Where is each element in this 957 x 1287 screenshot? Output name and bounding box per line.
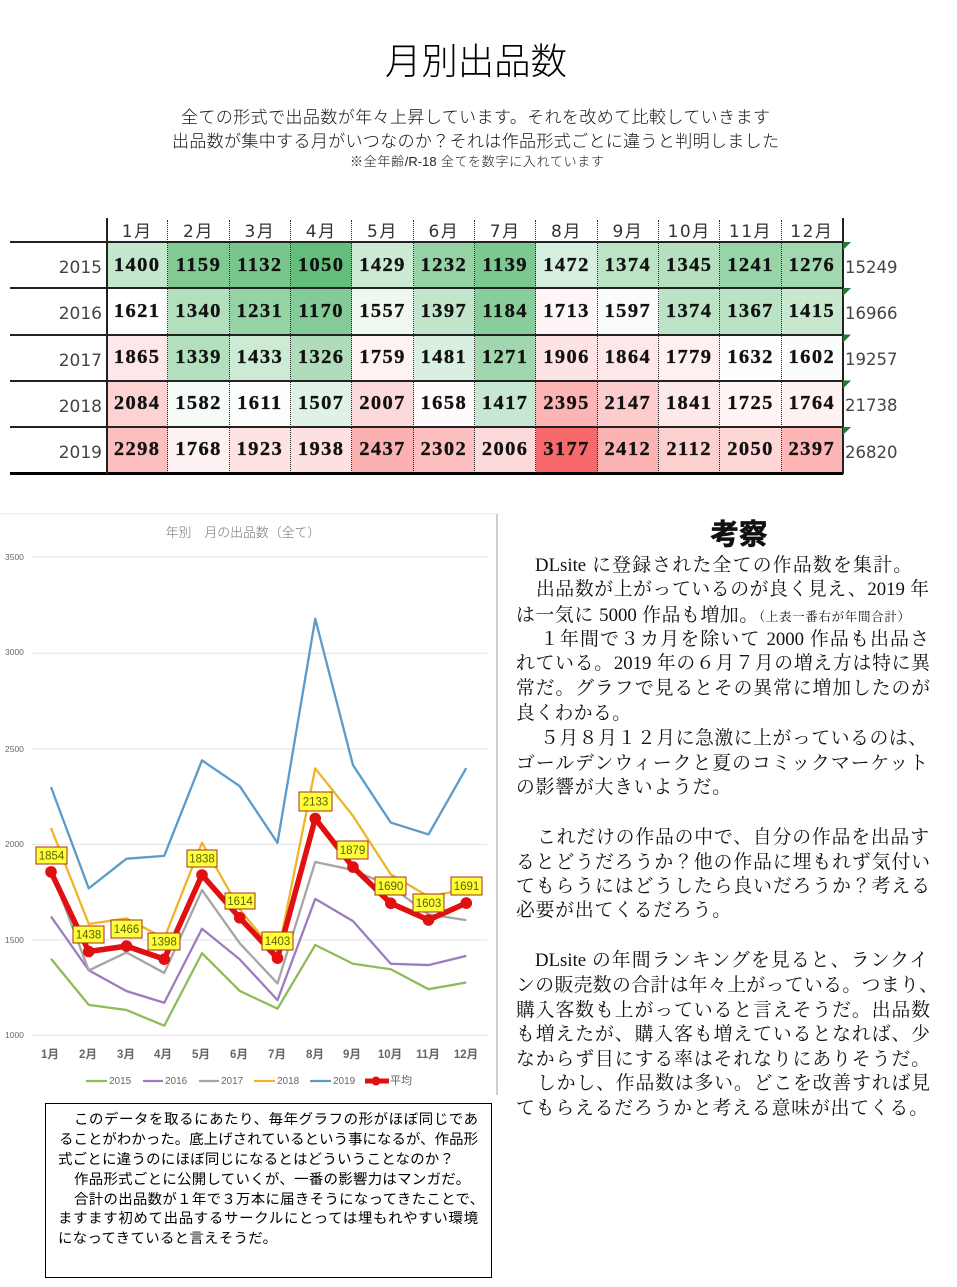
heatmap table: 1621 — [114, 300, 160, 322]
heatmap table: 1611 — [237, 392, 283, 414]
heatmap table: 1865 — [114, 346, 160, 368]
heatmap table: 1184 — [482, 300, 528, 322]
callout box — [45, 1103, 492, 1278]
heatmap table: 11月 — [729, 222, 772, 242]
heatmap table: 2016 — [59, 304, 102, 324]
heatmap table: 1374 — [605, 254, 651, 276]
x axis month labels: 1月 — [41, 1048, 59, 1061]
average data labels: 1466 — [114, 924, 139, 936]
y axis gridlines and labels: 1500 — [5, 935, 24, 945]
heatmap table: 2437 — [359, 438, 406, 460]
heatmap table: 2112 — [666, 438, 712, 460]
heatmap table: 5月 — [367, 222, 398, 242]
heatmap table: 1339 — [175, 346, 222, 368]
heatmap table: 10月 — [668, 222, 711, 242]
heatmap table: 1374 — [666, 300, 712, 322]
heatmap table: 1632 — [727, 346, 774, 368]
callout box: 合計の出品数が１年で３万本に届きそうになってきたことで、 — [74, 1192, 484, 1208]
heatmap table: 21738 — [845, 396, 898, 415]
x axis month labels — [41, 1048, 478, 1061]
heatmap table: 1864 — [605, 346, 651, 368]
heatmap table: 1417 — [482, 392, 528, 414]
heatmap table: 1170 — [298, 300, 344, 322]
heatmap table: 1557 — [359, 300, 406, 322]
y axis gridlines and labels: 2000 — [5, 839, 24, 849]
x axis month labels: 2月 — [79, 1048, 97, 1061]
average series with markers — [45, 813, 472, 965]
heatmap table: 1658 — [421, 392, 467, 414]
y axis gridlines and labels: 3500 — [5, 552, 24, 562]
heatmap table: 1367 — [727, 300, 774, 322]
analysis text block: なからず目にする率はそれなりにありそうだ。 — [516, 1049, 930, 1070]
average data labels — [36, 792, 482, 950]
subtitle text block: 全ての形式で出品数が年々上昇しています。それを改めて比較していきます — [181, 108, 770, 127]
analysis text block: DLsite に登録された全ての作品数を集計。 — [535, 555, 912, 576]
heatmap table: 1345 — [666, 254, 712, 276]
x axis month labels: 8月 — [306, 1048, 324, 1061]
x axis month labels: 4月 — [154, 1048, 172, 1061]
x axis month labels: 6月 — [230, 1048, 248, 1061]
heatmap table: 16966 — [845, 304, 898, 323]
analysis text block: ゴールデンウィークと夏のコミックマーケット — [516, 753, 928, 774]
heatmap table: 1276 — [789, 254, 835, 276]
callout box: このデータを取るにあたり、毎年グラフの形がほぼ同じであ — [74, 1112, 478, 1128]
heatmap table: 1713 — [543, 300, 590, 322]
x axis month labels: 12月 — [454, 1048, 478, 1061]
heatmap table — [10, 218, 898, 475]
heatmap table: 1507 — [298, 392, 344, 414]
x axis month labels: 3月 — [117, 1048, 135, 1061]
heatmap table: 1月 — [122, 222, 153, 242]
series 2019 — [51, 619, 466, 888]
analysis text block: てもらうにはどうしたら良いだろうか？考える — [516, 876, 930, 897]
average data labels: 1690 — [378, 881, 403, 893]
heatmap table: 2017 — [59, 351, 102, 371]
callout box: ることがわかった。底上げされているという事になるが、作品形 — [59, 1132, 478, 1148]
analysis text block: の影響が大きいようだ。 — [516, 777, 731, 798]
analysis text block: も増えたが、購入客も増えているとなれば、少 — [516, 1024, 930, 1045]
heatmap table: 1906 — [543, 346, 590, 368]
heatmap table: 1597 — [605, 300, 651, 322]
series 2016 — [51, 899, 466, 1003]
heatmap table: 6月 — [428, 222, 459, 242]
x axis month labels: 9月 — [343, 1048, 361, 1061]
heatmap table: 1472 — [543, 254, 590, 276]
heatmap table: 1159 — [176, 254, 221, 276]
analysis text block: てもらえるだろうかと考える意味が出てくる。 — [516, 1098, 928, 1119]
legend: 2019 — [333, 1076, 356, 1087]
x axis month labels: 5月 — [192, 1048, 210, 1061]
analysis text block: 出品数が上がっているのが良く見え、2019 年 — [536, 579, 929, 600]
average data labels: 1438 — [76, 930, 101, 942]
subtitle text block: ※全年齢/R-18 全てを数字に入れています — [350, 154, 604, 169]
heatmap table: 2月 — [183, 222, 214, 242]
x axis month labels: 11月 — [416, 1048, 440, 1061]
series 2017 — [51, 862, 466, 983]
analysis text block: DLsite の年間ランキングを見ると、ランクイ — [535, 950, 928, 971]
analysis text block: るとどうだろうか？他の作品に埋もれず気付い — [516, 852, 930, 873]
heatmap table: 1139 — [482, 254, 528, 276]
analysis text block — [516, 554, 938, 1119]
heatmap table: 1923 — [237, 438, 283, 460]
heatmap table: 1050 — [298, 254, 344, 276]
callout box: になってきていると言えそうだ。 — [58, 1231, 277, 1247]
heatmap table: 1340 — [175, 300, 222, 322]
heatmap table: 7月 — [490, 222, 521, 242]
analysis text block: これだけの作品の中で、自分の作品を出品す — [537, 827, 929, 848]
legend: 2016 — [165, 1076, 188, 1087]
heatmap table: 1764 — [789, 392, 835, 414]
heatmap table: 1841 — [666, 392, 712, 414]
heatmap table: 1602 — [789, 346, 835, 368]
legend: 2015 — [109, 1076, 132, 1087]
subtitle text block — [172, 108, 779, 169]
analysis text block: ５月８月１２月に急激に上がっているのは、 — [540, 728, 927, 749]
heatmap table: 1232 — [421, 254, 467, 276]
heatmap table: 2015 — [59, 258, 102, 278]
heatmap table: 1241 — [727, 254, 774, 276]
average data labels: 1691 — [454, 881, 479, 893]
subtitle text block: 出品数が集中する月がいつなのか？それは作品形式ごとに違うと判明しました — [172, 132, 779, 151]
heatmap table: 2084 — [114, 392, 160, 414]
average data labels: 1838 — [189, 854, 215, 866]
heatmap table: 15249 — [845, 258, 898, 277]
average data labels: 1879 — [340, 845, 365, 857]
heatmap table: 1759 — [359, 346, 406, 368]
average data labels: 1603 — [416, 898, 441, 910]
heatmap table: 1429 — [359, 254, 406, 276]
heatmap table: 2147 — [605, 392, 651, 414]
heatmap table: 1433 — [237, 346, 283, 368]
heatmap table: 1582 — [175, 392, 222, 414]
heatmap table: 1725 — [727, 392, 774, 414]
heatmap table: 2397 — [789, 438, 835, 460]
heatmap table: 3月 — [244, 222, 275, 242]
series 2015 — [51, 945, 466, 1026]
average data labels: 2133 — [303, 796, 328, 808]
heatmap table: 1768 — [175, 438, 222, 460]
heatmap table: 2395 — [543, 392, 590, 414]
legend: 2018 — [277, 1076, 300, 1087]
heatmap table: 12月 — [790, 222, 833, 242]
x axis month labels: 7月 — [268, 1048, 286, 1061]
analysis text block: 常だ。グラフで見るとその異常に増加したのが — [516, 678, 930, 699]
line chart panel — [0, 514, 498, 1095]
analysis text block: 購入客数も上がっていると言えそうだ。出品数 — [516, 1000, 930, 1021]
title: 月別出品数 — [385, 41, 567, 82]
heatmap table: 2007 — [359, 392, 406, 414]
heatmap table: 1400 — [114, 254, 160, 276]
legend: 2017 — [221, 1076, 244, 1087]
heatmap table: 1326 — [298, 346, 344, 368]
heatmap table: 26820 — [845, 443, 898, 462]
heatmap table: 1938 — [298, 438, 344, 460]
heatmap table: 2018 — [59, 397, 102, 417]
heatmap table: 1779 — [666, 346, 712, 368]
heatmap table: 3177 — [543, 438, 590, 460]
heatmap table: 2050 — [727, 438, 774, 460]
heatmap table: 1271 — [482, 346, 528, 368]
heatmap table: 4月 — [306, 222, 337, 242]
legend — [86, 1073, 412, 1087]
analysis text block: 必要が出てくるだろう。 — [516, 900, 731, 921]
analysis text block: １年間で３カ月を除いて 2000 作品も出品さ — [540, 629, 929, 650]
heatmap table: 9月 — [612, 222, 643, 242]
callout box: ますます初めて出品するサークルにとっては埋もれやすい環境 — [58, 1211, 478, 1227]
y axis gridlines and labels: 2500 — [5, 744, 24, 754]
heatmap table: 2019 — [59, 443, 102, 463]
heatmap table: 2006 — [482, 438, 528, 460]
y axis gridlines and labels: 3000 — [5, 647, 24, 657]
heatmap table: 1397 — [421, 300, 467, 322]
callout box: 式ごとに違うのにほぼ同じになるとはどういうことなのか？ — [58, 1152, 454, 1168]
chart title: 年別 月の出品数（全て） — [166, 525, 320, 540]
average data labels: 1403 — [265, 936, 290, 948]
heatmap table: 2298 — [114, 438, 160, 460]
analysis text block: 良くわかる。 — [516, 703, 631, 724]
heatmap table: 2302 — [421, 438, 467, 460]
heatmap table: 1415 — [789, 300, 835, 322]
heatmap table: 1231 — [237, 300, 283, 322]
y axis gridlines and labels — [5, 552, 487, 1040]
average data labels: 1398 — [151, 936, 177, 948]
analysis text block: は一気に 5000 作品も増加。（上表一番右が年間合計） — [516, 605, 910, 626]
analysis text block: れている。2019 年の６月７月の増え方は特に異 — [516, 653, 930, 674]
heatmap table: 1132 — [237, 254, 283, 276]
heatmap table: 1481 — [421, 346, 467, 368]
heatmap table: 19257 — [845, 350, 898, 369]
heatmap table: 2412 — [605, 438, 651, 460]
y axis gridlines and labels: 1000 — [5, 1030, 24, 1040]
average data labels: 1614 — [227, 896, 253, 908]
heading: analysis: 考察 — [710, 519, 768, 551]
callout box: 作品形式ごとに公開していくが、一番の影響力はマンガだ。 — [74, 1172, 470, 1188]
analysis text block: しかし、作品数は多い。どこを改善すれば見 — [537, 1073, 930, 1094]
analysis text block: ンの販売数の合計は年々上がっている。つまり、 — [516, 975, 938, 996]
heatmap table: 8月 — [551, 222, 582, 242]
average data labels: 1854 — [39, 850, 65, 862]
x axis month labels: 10月 — [378, 1048, 402, 1061]
series 2018 — [51, 768, 466, 956]
legend: 平均 — [390, 1073, 412, 1087]
